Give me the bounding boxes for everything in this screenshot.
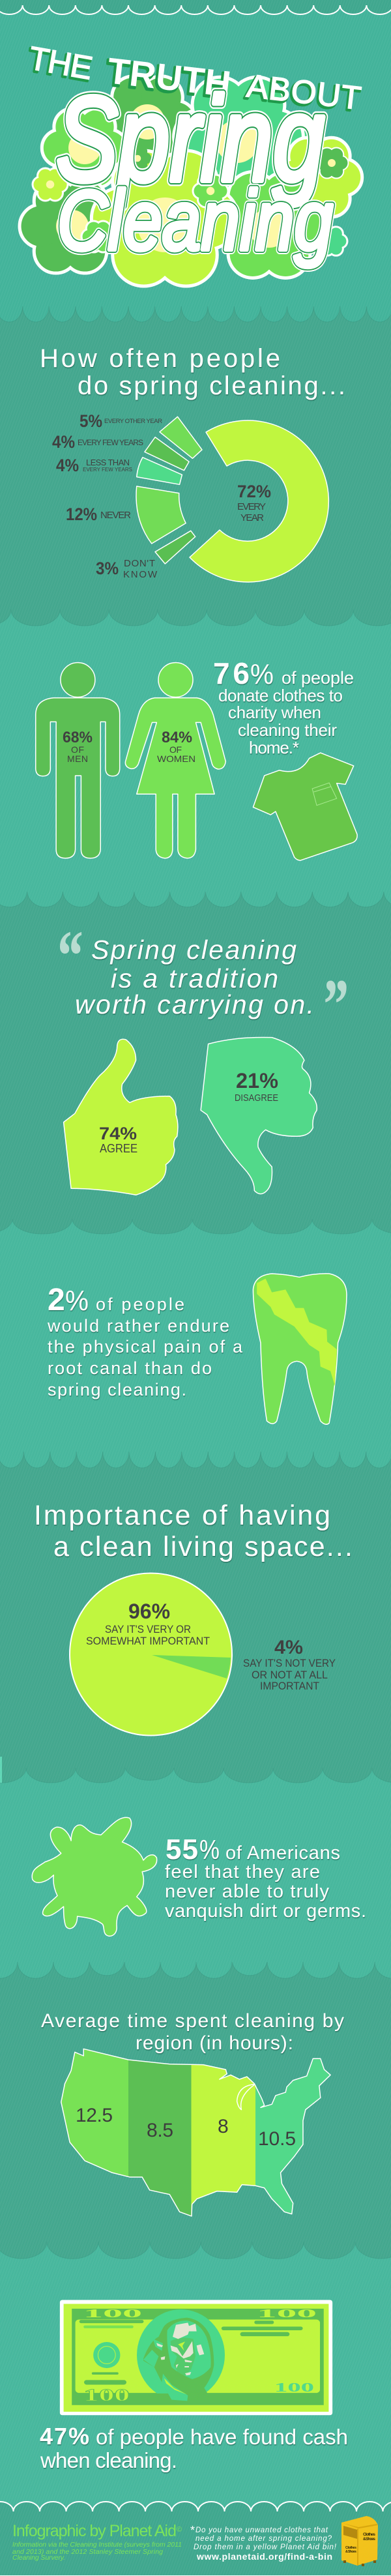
germs statistic: 55 xyxy=(166,1834,198,1866)
icon: woman xyxy=(125,662,225,858)
region values: 10.5 xyxy=(258,2128,296,2150)
chart labels: LESS THAN xyxy=(86,458,130,467)
heading: time by region xyxy=(41,2010,344,2054)
icon: yellow donation bin xyxy=(341,2516,378,2566)
root canal statistic: would rather endure xyxy=(47,1316,229,1336)
panel: importance xyxy=(34,1500,353,1735)
icon: tooth xyxy=(253,1274,347,1424)
cash statistic: 47% xyxy=(40,2423,89,2450)
icon: thumbs down xyxy=(201,1037,317,1194)
bill numerals: 100 xyxy=(257,2307,317,2320)
root canal statistic: the physical pain of a xyxy=(48,1337,243,1356)
chart labels: 5% xyxy=(80,411,102,431)
footer credit: Information via the Cleaning Institute (surveys from 2011 xyxy=(12,2541,182,2549)
bill numerals: 100 xyxy=(274,2380,314,2395)
footer call to action: Do you have unwanted clothes that xyxy=(195,2526,328,2534)
agree and disagree stats: DISAGREE xyxy=(235,1092,278,1104)
panel: tradition quote xyxy=(55,916,347,1195)
donation statistic: cleaning their xyxy=(238,720,337,740)
donation statistic: home.* xyxy=(249,738,299,757)
quote marks: “ xyxy=(55,916,82,995)
chart labels: KNOW xyxy=(123,569,158,580)
region values: 8 xyxy=(218,2116,229,2137)
footer credit: and 2013) and the 2012 Stanley Steemer Spring xyxy=(12,2548,163,2556)
icon: thumbs up xyxy=(64,1039,178,1195)
small flowers xyxy=(34,145,347,255)
pie label 4%: OR NOT AT ALL xyxy=(252,1669,328,1681)
icon: dirt splat xyxy=(32,1817,157,1936)
root canal statistic: of people xyxy=(96,1295,184,1314)
footer credit: Infographic by Planet Aid xyxy=(12,2522,177,2540)
chart labels: EVERY FEW YEARS xyxy=(83,467,132,473)
flower: teal right xyxy=(246,128,328,204)
root canal statistic: 2 xyxy=(48,1283,65,1317)
flower: light green left xyxy=(44,110,126,186)
quote text: worth carrying on. xyxy=(75,989,314,1019)
US map xyxy=(61,2048,331,2217)
cash statistic: of people have found cash xyxy=(96,2425,348,2449)
title: THE: THE xyxy=(25,41,94,88)
men and women stats: 84% xyxy=(162,729,192,746)
icon: yellow donation bin: Clothes xyxy=(345,2546,356,2550)
germs statistic: of Americans xyxy=(225,1843,340,1864)
donation statistic: donate clothes to xyxy=(218,686,343,705)
pie chart xyxy=(70,1573,232,1735)
germs statistic xyxy=(165,1834,366,1922)
donut segment: every year 72% xyxy=(190,420,328,582)
bill numerals: 100 xyxy=(83,2307,142,2320)
chart labels: 12% xyxy=(66,505,97,524)
men and women stats: OF xyxy=(71,744,84,755)
footer xyxy=(12,2516,378,2566)
flower: lime right xyxy=(278,139,360,215)
men and women stats: 68% xyxy=(63,729,93,746)
root canal statistic: % xyxy=(65,1285,89,1317)
heading: importance: Importance of having xyxy=(34,1500,330,1531)
panel: found cash xyxy=(40,2300,348,2472)
icon: yellow donation bin: & Shoes xyxy=(345,2550,356,2554)
chart labels: EVERY FEW YEARS xyxy=(78,438,143,447)
title: ABOUT: ABOUT xyxy=(245,67,363,117)
heading: how often: How often people xyxy=(40,344,280,373)
germs statistic: feel that they are xyxy=(165,1862,320,1882)
pie label 4%: IMPORTANT xyxy=(260,1680,319,1692)
donation statistic: charity when xyxy=(228,703,321,722)
quote text xyxy=(75,935,314,1019)
icon: yellow donation bin: Clothes xyxy=(363,2532,375,2537)
pie label 96% xyxy=(86,1600,210,1647)
chart labels: 4% xyxy=(52,432,75,452)
chart labels: 3% xyxy=(96,559,119,578)
donut segments: small shares xyxy=(136,417,202,564)
bill numerals xyxy=(83,2307,317,2405)
panel: time by region xyxy=(41,2010,344,2223)
root canal statistic xyxy=(47,1283,243,1399)
region values: 12.5 xyxy=(76,2105,113,2126)
flower: teal large xyxy=(175,79,302,195)
footer call to action: * xyxy=(190,2524,195,2537)
root canal statistic: spring cleaning. xyxy=(48,1380,186,1399)
chart labels: EVERY OTHER YEAR xyxy=(104,418,162,425)
germs statistic: never able to truly xyxy=(165,1881,330,1902)
icon: t-shirt xyxy=(253,753,357,860)
chart labels: 4% xyxy=(56,456,79,475)
quote text: is a tradition xyxy=(111,963,278,993)
agree and disagree stats: 74% xyxy=(99,1124,137,1143)
germs statistic: vanquish dirt or germs. xyxy=(165,1901,366,1922)
title xyxy=(25,39,363,268)
heading: how often: do spring cleaning... xyxy=(78,372,345,400)
men and women stats: MEN xyxy=(67,754,88,764)
flower: dark green lower left xyxy=(22,181,119,272)
agree and disagree stats: 21% xyxy=(236,1069,278,1092)
heading: time by region: Average time spent cleaning by xyxy=(41,2010,344,2032)
pie label 96%: SOMEWHAT IMPORTANT xyxy=(86,1635,210,1647)
panel: germs xyxy=(32,1817,366,1936)
germs statistic: % xyxy=(199,1834,220,1865)
bill portrait xyxy=(130,2309,235,2404)
men and women stats: WOMEN xyxy=(157,754,195,764)
footer call to action: www.planetaid.org/find-a-bin xyxy=(196,2551,332,2562)
title: THE: THE xyxy=(26,40,95,87)
footer call to action: need a home after spring cleaning? xyxy=(195,2535,332,2543)
donut chart xyxy=(136,417,328,582)
flower: dark green top xyxy=(100,78,195,166)
title: Cleaning: Cleaning xyxy=(57,173,333,268)
title: ABOUT: ABOUT xyxy=(243,69,362,119)
panel: how often xyxy=(40,344,345,582)
flower: lime large xyxy=(93,152,237,285)
quote marks: ” xyxy=(321,965,347,1044)
heading: time by region: region (in hours): xyxy=(136,2032,293,2054)
agree and disagree stats: AGREE xyxy=(100,1142,138,1155)
footer call to action xyxy=(190,2524,337,2562)
footer credit xyxy=(12,2522,182,2562)
pie label 4% xyxy=(243,1637,336,1692)
chart labels: DON'T xyxy=(124,558,155,569)
agree and disagree stats xyxy=(99,1069,278,1155)
cash statistic: when cleaning. xyxy=(40,2448,177,2472)
chart labels: 72% xyxy=(237,482,271,501)
icon: man xyxy=(36,662,120,858)
donation statistic: of people xyxy=(282,668,354,688)
flower: light green lower right xyxy=(213,173,325,276)
footer call to action: Drop them in a yellow Planet Aid bin! xyxy=(194,2543,337,2551)
quote marks xyxy=(55,916,347,1044)
men and women stats xyxy=(63,729,195,764)
quote text: Spring cleaning xyxy=(91,935,297,965)
cash statistic xyxy=(40,2423,348,2472)
panel: root canal xyxy=(47,1274,347,1424)
heading: importance: a clean living space... xyxy=(53,1531,353,1562)
chart labels: NEVER xyxy=(100,510,131,521)
footer credit: Cleaning Survery. xyxy=(12,2554,65,2562)
region values: 8.5 xyxy=(147,2120,173,2141)
pie label 4%: 4% xyxy=(274,1637,303,1658)
pie label 4%: SAY IT'S NOT VERY xyxy=(243,1657,336,1669)
title: TRUTH: TRUTH xyxy=(104,51,231,106)
chart labels: YEAR xyxy=(240,512,264,523)
men and women stats: OF xyxy=(169,744,182,755)
bill numerals: 100 xyxy=(83,2386,130,2405)
donation statistic: 76 xyxy=(213,656,250,690)
header flowers xyxy=(22,78,360,285)
root canal statistic: root canal than do xyxy=(48,1358,212,1378)
title: TRUTH: TRUTH xyxy=(106,50,233,104)
footer credit: © xyxy=(177,2526,182,2534)
chart labels: EVERY xyxy=(237,501,266,512)
title: Cleaning: Cleaning xyxy=(57,173,333,268)
heading: importance xyxy=(34,1500,353,1562)
panel: gender and donation xyxy=(36,656,357,860)
chart labels xyxy=(52,411,271,580)
pie label 96%: 96% xyxy=(128,1600,170,1623)
donation statistic xyxy=(213,656,354,757)
flower centres xyxy=(56,104,289,252)
heading: how often xyxy=(40,344,345,400)
icon: yellow donation bin: & Shoes xyxy=(363,2537,375,2541)
pie label 96%: SAY IT'S VERY OR xyxy=(105,1623,191,1635)
region values xyxy=(76,2105,296,2150)
donation statistic: % xyxy=(250,658,274,690)
title: Cleaning: Cleaning xyxy=(57,173,333,268)
icon: hundred dollar bill xyxy=(60,2300,332,2415)
